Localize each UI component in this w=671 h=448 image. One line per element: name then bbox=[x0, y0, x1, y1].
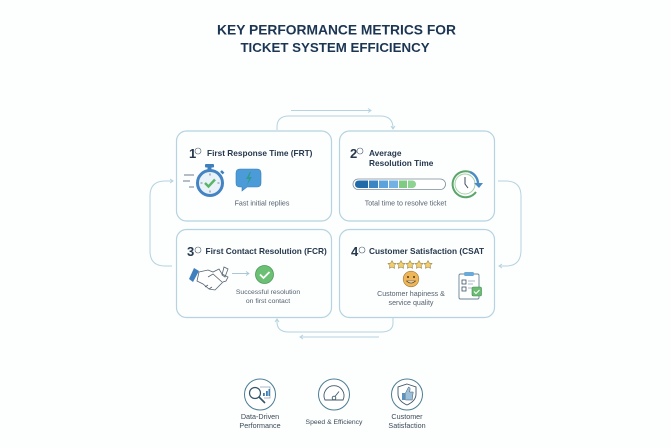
number 3 bbox=[187, 244, 201, 259]
heading: FRT: First Response Time (FRT) bbox=[207, 148, 313, 158]
panel: first contact resolution bbox=[176, 230, 332, 318]
icon: handshake bbox=[189, 267, 228, 290]
title: TICKET SYSTEM EFFICIENCY bbox=[240, 40, 430, 55]
title: KEY PERFORMANCE METRICS FOR bbox=[217, 22, 456, 38]
icon: lightning speech bubble bbox=[236, 169, 261, 191]
title bbox=[217, 22, 456, 55]
panel: customer satisfaction bbox=[340, 230, 494, 318]
text: customer happiness: Customer hapiness & bbox=[377, 290, 445, 298]
badge: data-driven performance: Data-Driven bbox=[241, 412, 279, 421]
badge: data-driven performance: Performance bbox=[239, 421, 281, 430]
badge: speed and efficiency bbox=[306, 379, 363, 426]
number 2 bbox=[350, 146, 363, 161]
badge: speed and efficiency: Speed & Efficiency bbox=[306, 419, 363, 426]
number 1: 1 bbox=[189, 146, 196, 161]
panel: average resolution time bbox=[340, 131, 494, 221]
progress bar bbox=[353, 179, 446, 190]
arrow: top curved bbox=[277, 116, 395, 130]
arrow: top straight bbox=[291, 108, 371, 112]
arrow: bottom curved bbox=[275, 318, 393, 332]
icon: clipboard bbox=[459, 272, 482, 299]
arrow: left curved bbox=[150, 179, 173, 266]
badge: customer satisfaction: Satisfaction bbox=[388, 421, 426, 430]
text: fast initial replies: Fast initial replies bbox=[235, 200, 290, 208]
icon: green check bbox=[256, 266, 274, 284]
heading: average resolution time: Average bbox=[369, 148, 402, 158]
number 1 bbox=[189, 146, 201, 161]
heading: average resolution time bbox=[369, 148, 434, 168]
icon: stopwatch bbox=[183, 164, 224, 196]
text: successful resolution: Successful resolution bbox=[236, 289, 300, 296]
badge: data-driven performance bbox=[239, 379, 281, 430]
arrow: handshake to check bbox=[232, 272, 249, 276]
text: successful resolution bbox=[236, 289, 300, 305]
icon: five stars bbox=[388, 260, 432, 268]
heading: average resolution time: Resolution Time bbox=[369, 158, 434, 168]
icon: smiley bbox=[403, 271, 419, 287]
number 2: 2 bbox=[350, 146, 357, 161]
number 4 bbox=[351, 244, 365, 259]
text: customer happiness bbox=[377, 290, 445, 307]
number 3: 3 bbox=[187, 244, 194, 259]
number 4: 4 bbox=[351, 244, 359, 259]
arrow: bottom straight bbox=[300, 335, 379, 339]
text: total time to resolve ticket: Total time to resolve ticket bbox=[365, 200, 446, 208]
icon: clock with arrow bbox=[453, 171, 483, 197]
badge: customer satisfaction bbox=[388, 379, 426, 430]
panel: first response time bbox=[176, 131, 332, 221]
arrow: right curved bbox=[498, 181, 521, 268]
text: successful resolution: on first contact bbox=[246, 298, 290, 305]
text: customer happiness: service quality bbox=[389, 299, 434, 307]
badge: customer satisfaction: Customer bbox=[391, 412, 423, 421]
heading: CSAT: Customer Satisfaction (CSAT bbox=[369, 246, 484, 256]
heading: FCR: First Contact Resolution (FCR) bbox=[206, 246, 327, 256]
